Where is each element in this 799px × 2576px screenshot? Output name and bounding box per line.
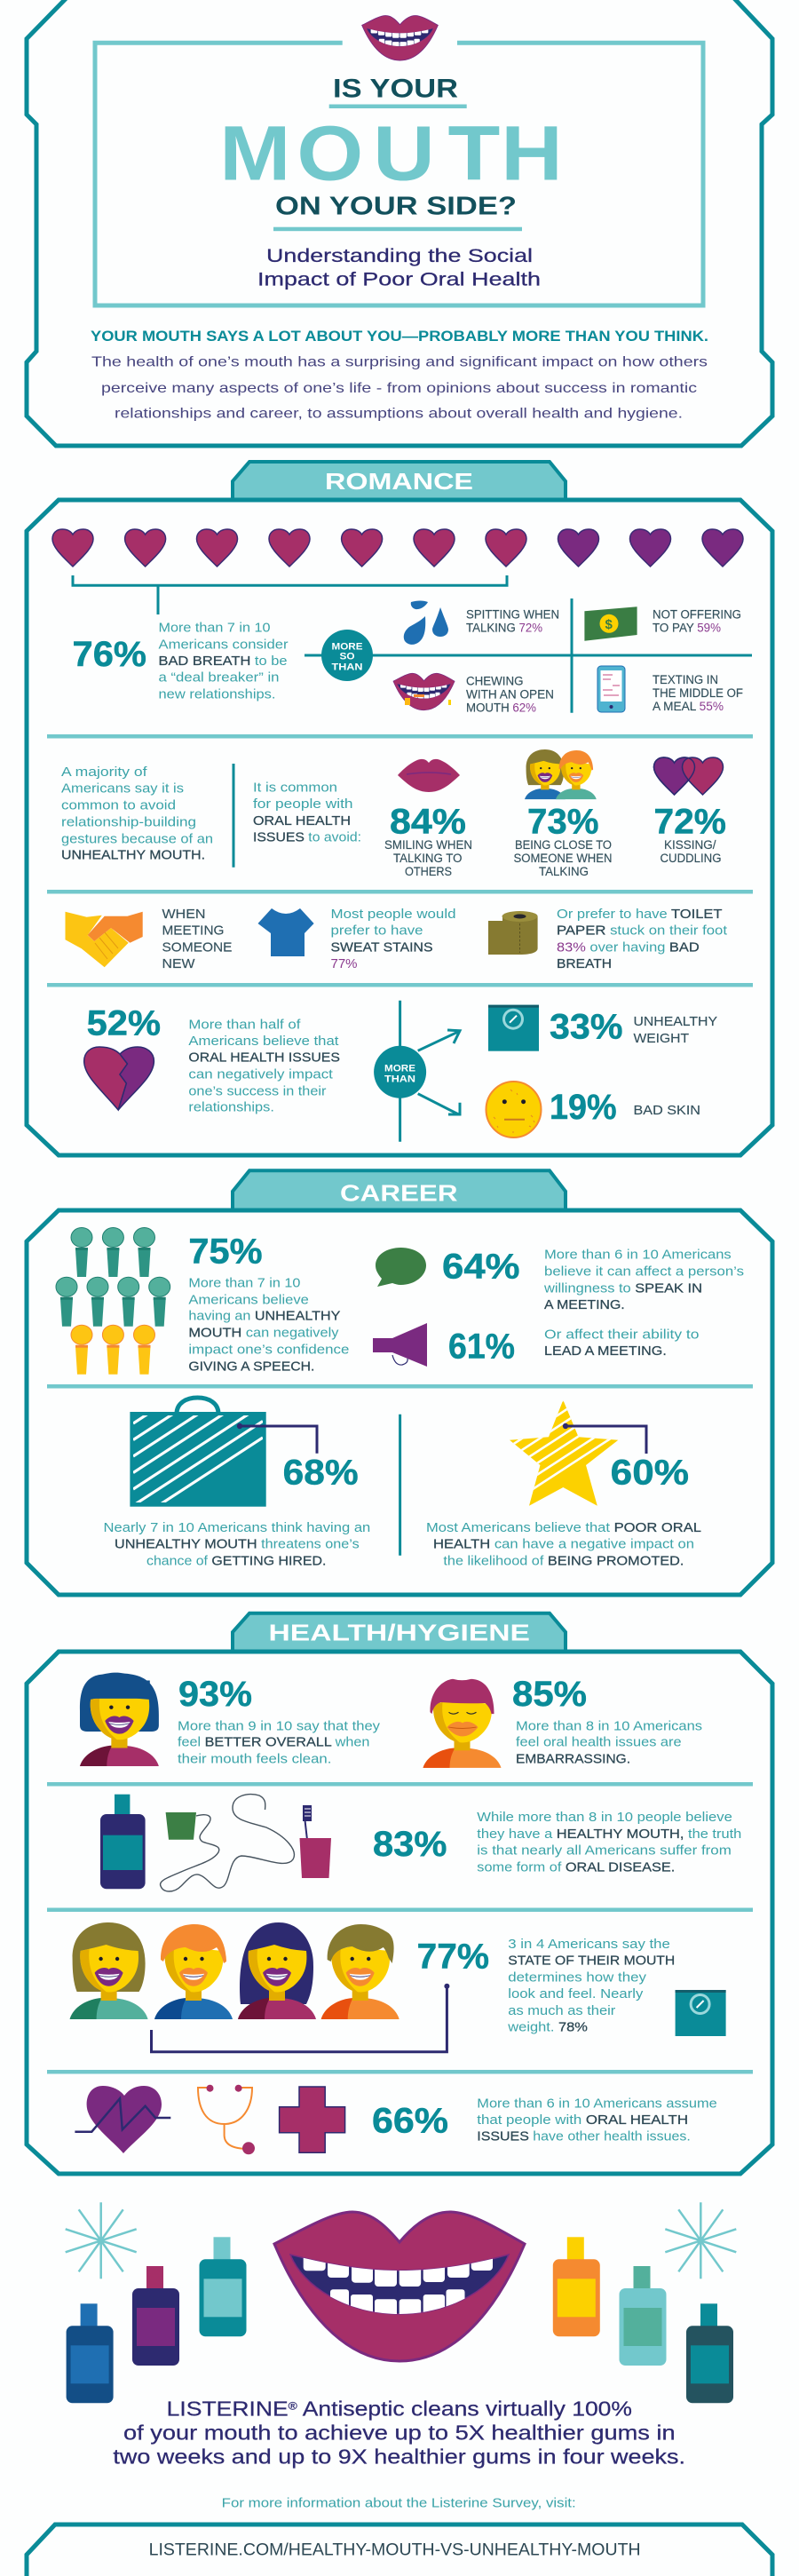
- stat: 33%: UNHEALTHY: [634, 1014, 717, 1029]
- stat: 75%: [188, 1233, 349, 1374]
- panel: url: [27, 2524, 772, 2576]
- stat: 76%: new relationships.: [158, 687, 275, 702]
- stat: 83%: some form of ORAL DISEASE.: [477, 1859, 675, 1875]
- stat: 84%: OTHERS: [405, 865, 452, 878]
- stat: 68%: UNHEALTHY MOUTH threatens one’s: [115, 1536, 360, 1551]
- title: IS YOUR: [333, 74, 458, 103]
- stat: 66%: 66%: [372, 2102, 448, 2141]
- stat: 60%: HEALTH can have a negative impact on: [433, 1536, 694, 1551]
- intro text: relationships and career, to assumptions about overall health and hygiene.: [115, 407, 683, 421]
- badge: more so than: SO: [339, 652, 355, 662]
- stat: 68%: Nearly 7 in 10 Americans think having an: [103, 1520, 370, 1535]
- stat: 64%: A MEETING.: [544, 1297, 625, 1312]
- text: it is common: for people with: [253, 797, 353, 812]
- icon: mouthwash bottle: [100, 1795, 146, 1889]
- label: chewing: CHEWING: [466, 675, 524, 688]
- section tab: health/hygiene: HEALTH/HYGIENE: [268, 1619, 530, 1645]
- stat: 73%: BEING CLOSE TO: [515, 838, 612, 852]
- stat: 84%: 84%: [390, 802, 466, 841]
- text: a majority: gestures because of an: [61, 831, 213, 846]
- stat: 61%: 61%: [448, 1327, 515, 1366]
- text: sweat stains: [330, 907, 456, 971]
- icon: smiling mouth: [362, 16, 438, 60]
- intro text: [91, 328, 708, 421]
- title: ON YOUR SIDE?: [275, 193, 517, 221]
- text: when meeting: SOMEONE: [162, 939, 233, 955]
- stat: 85%: EMBARRASSING.: [516, 1752, 630, 1767]
- text: toilet paper: Or prefer to have TOILET: [557, 907, 723, 922]
- icon: closed lips: [398, 759, 460, 792]
- stat: 75%: More than 7 in 10: [188, 1275, 300, 1290]
- closing statement: of your mouth to achieve up to 5X healthier gums in: [123, 2421, 676, 2445]
- icon: woman: [80, 1673, 159, 1766]
- stat: 72%: 72%: [653, 802, 726, 841]
- icon: bottle teal: [199, 2237, 247, 2336]
- label: not paying: [653, 608, 741, 635]
- stat: 85%: 85%: [512, 1675, 587, 1714]
- callout line: [563, 1423, 646, 1454]
- stat: 64%: willingness to SPEAK IN: [543, 1281, 702, 1296]
- icon: big smiling mouth: [274, 2212, 525, 2361]
- text: more than half: [188, 1017, 340, 1115]
- icon: bottle purple: [132, 2266, 179, 2366]
- stat: 68%: [103, 1454, 370, 1568]
- stat: 64%: More than 6 in 10 Americans: [544, 1248, 732, 1263]
- stat: 60%: [426, 1454, 701, 1568]
- text: sweat stains: SWEAT STAINS: [330, 939, 433, 955]
- stat: 68%: 68%: [283, 1454, 359, 1493]
- hearts row: 7 in 10: [52, 529, 743, 567]
- stat: 72%: KISSING/: [664, 838, 716, 852]
- stat: 84%: [384, 802, 472, 878]
- closing statement: Antiseptic cleans virtually 100%: [297, 2398, 632, 2421]
- icon: stethoscope: [198, 2085, 255, 2154]
- text: it is common: ISSUES to avoid:: [253, 830, 361, 845]
- icon: spit drops: [404, 600, 448, 645]
- stat: 64%: believe it can affect a person’s: [544, 1264, 744, 1280]
- text: more than half: Americans believe that: [188, 1034, 339, 1049]
- closing statement: [113, 2398, 685, 2469]
- stat: 77%: [417, 1937, 675, 2035]
- stat: 19%: BAD SKIN: [634, 1103, 700, 1118]
- badge: more so than: MORE: [332, 642, 362, 653]
- icon: bottle orange: [553, 2237, 600, 2336]
- icon: money: $: [605, 617, 613, 632]
- icon: money: [584, 606, 637, 641]
- panel: header: [27, 0, 772, 446]
- badge: more than with arrows: MORE: [384, 1064, 415, 1074]
- stat: 84%: SMILING WHEN: [384, 838, 472, 852]
- stat: 60%: 60%: [611, 1454, 689, 1493]
- header frame: [95, 43, 703, 305]
- bracket: [73, 575, 507, 614]
- stat: 19%: 19%: [550, 1088, 617, 1127]
- label: spitting: TALKING 72%: [466, 622, 542, 635]
- stat: 75%: having an UNHEALTHY: [188, 1309, 340, 1324]
- stat: 68%: chance of GETTING HIRED.: [146, 1553, 326, 1568]
- badge: more so than: THAN: [332, 662, 363, 672]
- stat: 66%: More than 6 in 10 Americans assume: [477, 2096, 717, 2111]
- stat: 77%: 3 in 4 Americans say the: [508, 1937, 670, 1952]
- icon: floss: [161, 1795, 294, 1891]
- icon: handshake: [66, 912, 143, 967]
- stat: 77%: determines how they: [508, 1970, 646, 1986]
- stat: 76%: 76%: [73, 635, 146, 674]
- label: chewing: WITH AN OPEN: [466, 688, 554, 701]
- stat: 66%: [372, 2096, 717, 2144]
- stat: 60%: the likelihood of BEING PROMOTED.: [443, 1553, 684, 1568]
- stat: 66%: ISSUES have other health issues.: [477, 2129, 691, 2144]
- stat: 76%: BAD BREATH to be: [158, 654, 288, 669]
- text: when meeting: [162, 907, 233, 971]
- stat: 75%: 75%: [188, 1233, 263, 1272]
- intro text: perceive many aspects of one’s life - from opinions about success in romantic: [101, 381, 697, 396]
- icon: couple: [525, 749, 597, 799]
- stat: 73%: [513, 802, 613, 878]
- text: when meeting: NEW: [162, 956, 195, 971]
- stat: 75%: GIVING A SPEECH.: [188, 1359, 314, 1374]
- stat: 76%: Americans consider: [158, 638, 289, 653]
- label: not paying: TO PAY 59%: [653, 622, 721, 635]
- label: texting: TEXTING IN: [653, 673, 718, 686]
- icon: scale: [488, 1005, 539, 1051]
- stat: 72%: CUDDLING: [661, 852, 721, 865]
- stat: 33%: WEIGHT: [634, 1031, 689, 1046]
- stat: 19%: [550, 1088, 700, 1127]
- stat: 33%: [550, 1007, 717, 1046]
- text: sweat stains: prefer to have: [330, 923, 423, 939]
- text: a majority: relationship-building: [61, 815, 196, 830]
- stat: 73%: 73%: [527, 802, 598, 841]
- icon: scale: [676, 1990, 726, 2036]
- text: it is common: [253, 781, 361, 845]
- icon: speech bubble: [376, 1248, 426, 1287]
- panel: romance: [27, 500, 772, 1155]
- icon: briefcase: [130, 1396, 266, 1507]
- stat: 33%: 33%: [550, 1007, 623, 1046]
- text: toilet paper: [557, 907, 728, 971]
- section tab: health/hygiene: [233, 1613, 566, 1652]
- text: more than half: one’s success in their: [188, 1083, 326, 1098]
- source note: For more information about the Listerine Survey, visit:: [222, 2495, 576, 2510]
- text: it is common: It is common: [253, 781, 337, 796]
- text: more than half: can negatively impact: [188, 1066, 334, 1082]
- stat: 83%: they have a HEALTHY MOUTH, the truth: [477, 1827, 741, 1842]
- text: it is common: ORAL HEALTH: [253, 813, 351, 828]
- stat: 75%: MOUTH can negatively: [188, 1326, 339, 1341]
- stat: 93%: [178, 1675, 381, 1767]
- text: more than half: More than half of: [188, 1017, 301, 1032]
- badge: more than with arrows: THAN: [384, 1074, 415, 1084]
- text: toilet paper: 83% over having BAD: [557, 939, 700, 955]
- section tab: romance: ROMANCE: [325, 468, 473, 495]
- icon: face with bad skin: [487, 1082, 542, 1137]
- title: [219, 74, 563, 231]
- icon: shirt: [257, 908, 314, 956]
- title: MOUTH: [219, 111, 563, 197]
- icon: sparkle left: [66, 2202, 137, 2279]
- stat: 77%: look and feel. Nearly: [508, 1986, 644, 2001]
- stat: 83%: While more than 8 in 10 people believe: [477, 1810, 732, 1825]
- panel: career: [27, 1210, 772, 1595]
- stat: 75%: impact one’s confidence: [188, 1342, 349, 1357]
- stat: 52%: 52%: [87, 1004, 161, 1043]
- icon: two hearts: [653, 757, 723, 795]
- panel: url: LISTERINE.COM/HEALTHY-MOUTH-VS-UNHEALTHY-MOUTH: [149, 2541, 641, 2560]
- intro text: The health of one’s mouth has a surprising and significant impact on how others: [91, 355, 708, 370]
- icon: man: [423, 1679, 501, 1768]
- icon: four smiling people: [70, 1922, 400, 2019]
- icon: chewing mouth: [393, 673, 455, 710]
- subtitle: [257, 246, 541, 290]
- subtitle: Understanding the Social: [266, 246, 533, 266]
- stat: 76%: More than 7 in 10: [158, 621, 270, 636]
- text: more than half: ORAL HEALTH ISSUES: [188, 1050, 340, 1066]
- badge: more than with arrows: [374, 1030, 460, 1114]
- section tab: romance: [233, 462, 566, 499]
- stat: 73%: TALKING: [539, 865, 589, 878]
- label: chewing: MOUTH 62%: [466, 701, 536, 715]
- text: toilet paper: PAPER stuck on their foot: [557, 923, 728, 939]
- stat: 61%: LEAD A MEETING.: [544, 1343, 667, 1359]
- panel: health: [27, 1652, 772, 2174]
- icon: medical cross: [280, 2087, 345, 2152]
- stat: 93%: More than 9 in 10 say that they: [178, 1718, 381, 1733]
- text: more than half: relationships.: [188, 1100, 274, 1115]
- stat: 72%: [653, 802, 726, 865]
- text: sweat stains: 77%: [330, 956, 357, 971]
- text: toilet paper: BREATH: [557, 956, 612, 971]
- text: when meeting: MEETING: [162, 923, 224, 939]
- label: not paying: NOT OFFERING: [653, 608, 741, 622]
- stat: 85%: [512, 1675, 702, 1767]
- icon: megaphone: [373, 1323, 427, 1367]
- stat: 60%: Most Americans believe that POOR ORAL: [426, 1520, 701, 1535]
- text: a majority: common to avoid: [61, 798, 176, 813]
- text: a majority: A majority of: [61, 765, 147, 780]
- bracket callout: [151, 1984, 449, 2052]
- stat: 93%: feel BETTER OVERALL when: [178, 1735, 369, 1750]
- stat: 93%: their mouth feels clean.: [178, 1752, 331, 1767]
- stat: 75%: Americans believe: [188, 1292, 309, 1307]
- icon: microphones: [56, 1227, 170, 1375]
- icon: toilet paper: [488, 911, 538, 955]
- stat: 66%: that people with ORAL HEALTH: [477, 2112, 688, 2128]
- stat: 61%: [448, 1327, 700, 1366]
- stat: 64%: 64%: [442, 1247, 520, 1286]
- icon: bottle dark teal: [686, 2303, 733, 2403]
- text: a majority: [61, 765, 213, 863]
- stat: 77%: 77%: [417, 1938, 489, 1977]
- stat: 61%: Or affect their ability to: [544, 1327, 700, 1342]
- stat: 83%: is that nearly all Americans suffer from: [477, 1843, 732, 1859]
- section tab: career: CAREER: [340, 1179, 458, 1206]
- label: texting: A MEAL 55%: [653, 700, 724, 713]
- stat: 64%: [442, 1247, 744, 1312]
- stat: 76%: [73, 621, 289, 702]
- icon: sparkle right: [665, 2202, 736, 2279]
- icon: phone: [597, 666, 625, 712]
- icon: heart with pulse: [75, 2086, 170, 2153]
- subtitle: Impact of Poor Oral Health: [257, 270, 541, 290]
- label: texting: [653, 673, 743, 713]
- icon: bottle blue: [67, 2303, 114, 2403]
- stat: 76%: a “deal breaker” in: [158, 670, 279, 686]
- closing statement: two weeks and up to 9X healthier gums in four weeks.: [113, 2445, 685, 2469]
- text: sweat stains: Most people would: [330, 907, 456, 922]
- label: texting: THE MIDDLE OF: [653, 686, 743, 700]
- stat: 77%: as much as their: [508, 2003, 615, 2018]
- stat: 85%: feel oral health issues are: [516, 1735, 682, 1750]
- stat: 84%: TALKING TO: [393, 852, 462, 865]
- label: spitting: [466, 608, 559, 635]
- label: chewing: [466, 675, 554, 715]
- badge: more so than: [321, 630, 373, 681]
- icon: star: [510, 1399, 618, 1506]
- text: when meeting: WHEN: [162, 907, 206, 922]
- text: a majority: UNHEALTHY MOUTH.: [61, 848, 205, 863]
- icon: broken heart: [84, 1047, 154, 1110]
- icon: bottle aqua: [620, 2266, 666, 2366]
- illustration: mouth, bottles and sparkles: [66, 2202, 736, 2403]
- stat: 73%: SOMEONE WHEN: [513, 852, 613, 865]
- closing statement: ®: [289, 2400, 297, 2413]
- label: spitting: SPITTING WHEN: [466, 608, 559, 622]
- callout line: [237, 1423, 317, 1454]
- icon: toothbrush in cup: [300, 1805, 331, 1878]
- cross lines: [305, 598, 752, 713]
- closing statement: LISTERINE: [167, 2398, 273, 2421]
- intro text: YOUR MOUTH SAYS A LOT ABOUT YOU—PROBABLY MORE THAN YOU THINK.: [91, 328, 708, 345]
- stat: 93%: 93%: [178, 1675, 252, 1714]
- text: a majority: Americans say it is: [61, 781, 184, 797]
- stat: 83%: 83%: [373, 1825, 447, 1864]
- stat: 77%: weight. 78%: [507, 2020, 588, 2035]
- stat: 83%: [373, 1810, 741, 1875]
- stat: 85%: More than 8 in 10 Americans: [516, 1718, 702, 1733]
- section tab: career: [233, 1170, 566, 1209]
- stat: 77%: STATE OF THEIR MOUTH: [508, 1954, 675, 1969]
